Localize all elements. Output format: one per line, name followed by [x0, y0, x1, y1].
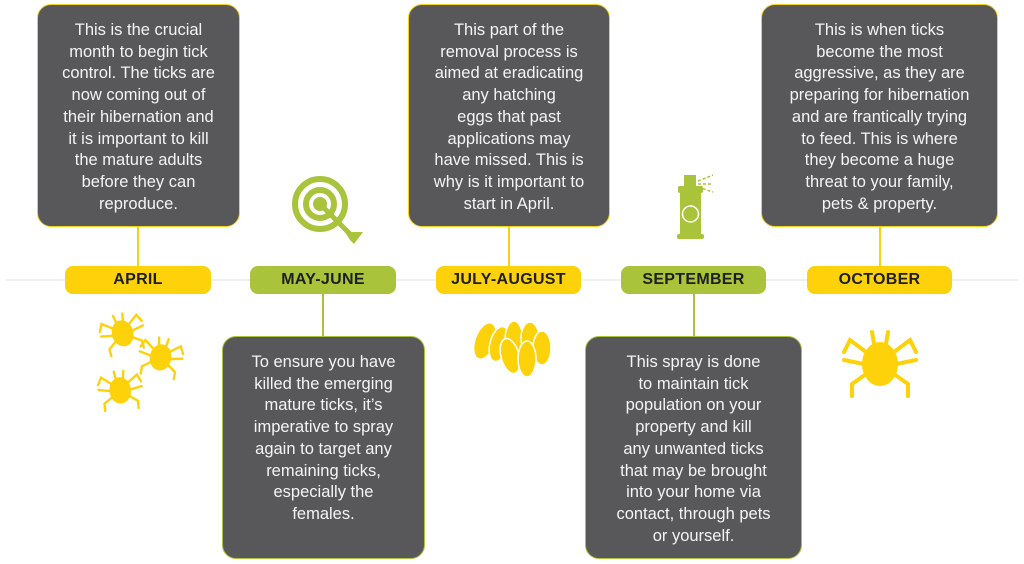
panel: april text: their hibernation and: [63, 108, 214, 126]
panel: september text: to maintain tick: [638, 375, 749, 393]
panel: october text: pets & property.: [822, 195, 937, 213]
pill: april: [65, 266, 211, 294]
panel: july-august text: [408, 4, 610, 227]
panel: september text: into your home via: [626, 483, 761, 501]
panel: may-june text: again to target any: [255, 440, 392, 458]
panel: september text: contact, through pets: [616, 505, 771, 523]
panel: may-june text: killed the emerging: [254, 375, 393, 393]
timeline line: [6, 279, 1018, 281]
panel: september text: any unwanted ticks: [623, 440, 764, 458]
panel: october text: they become a huge: [805, 151, 954, 169]
panel: september text: that may be brought: [620, 462, 767, 480]
panel: july-august text: removal process is: [440, 43, 578, 61]
panel: april text: month to begin tick: [69, 43, 208, 61]
panel: april text: control. The ticks are: [62, 64, 215, 82]
icon: spray can: [677, 175, 713, 239]
panel: july-august text: have missed. This is: [434, 151, 584, 169]
panel: september text: This spray is done: [627, 353, 760, 371]
panel: may-june text: remaining ticks,: [266, 462, 381, 480]
panel: may-june text: especially the: [274, 483, 373, 501]
panel: may-june text: [222, 336, 425, 559]
panel: april text: it is important to kill: [68, 130, 209, 148]
panel: july-august text: aimed at eradicating: [435, 64, 583, 82]
panel: july-august text: why is it important to: [434, 173, 584, 191]
panel: october text: threat to your family,: [805, 173, 954, 191]
panel: july-august text: start in April.: [464, 195, 554, 213]
pill: september: SEPTEMBER: [642, 271, 745, 288]
panel: april text: the mature adults: [75, 151, 202, 169]
panel: october text: preparing for hibernation: [790, 86, 969, 104]
pill: october: [807, 266, 952, 294]
panel: september text: or yourself.: [653, 527, 734, 545]
panel: april text: now coming out of: [72, 86, 205, 104]
panel: july-august text: This part of the: [454, 21, 564, 39]
icon: eggs: [469, 320, 551, 377]
panel: july-august text: eggs that past: [457, 108, 561, 126]
panel: september text: population on your: [626, 396, 761, 414]
panel: october text: [761, 4, 998, 227]
panel: october text: and are frantically trying: [792, 108, 967, 126]
panel: may-june text: imperative to spray: [254, 418, 393, 436]
panel: october text: become the most: [816, 43, 943, 61]
icon: ticks (april): [97, 309, 185, 411]
panel: april text: before they can: [82, 173, 195, 191]
panel: april text: This is the crucial: [75, 21, 202, 39]
panel: july-august text: applications may: [448, 130, 570, 148]
panel: april text: [37, 4, 240, 227]
panel: october text: aggressive, as they are: [794, 64, 965, 82]
icon: target: [295, 179, 363, 244]
pill: october: OCTOBER: [839, 271, 920, 288]
panel: july-august text: any hatching: [462, 86, 556, 104]
panel: october text: This is when ticks: [815, 21, 944, 39]
panel: september text: [585, 336, 802, 559]
panel: april text: reproduce.: [99, 195, 178, 213]
pill: may-june: MAY-JUNE: [281, 271, 365, 288]
pill: july-august: JULY-AUGUST: [451, 271, 566, 288]
pill: april: APRIL: [113, 271, 163, 288]
panel: october text: to feed. This is where: [801, 130, 958, 148]
panel: may-june text: To ensure you have: [251, 353, 396, 371]
icon: big tick (october): [844, 332, 916, 396]
panel: may-june text: females.: [292, 505, 355, 523]
panel: may-june text: mature ticks, it’s: [264, 396, 382, 414]
pill: may-june: [250, 266, 396, 294]
pill: july-august: [436, 266, 581, 294]
pill: september: [621, 266, 766, 294]
panel: september text: property and kill: [635, 418, 752, 436]
